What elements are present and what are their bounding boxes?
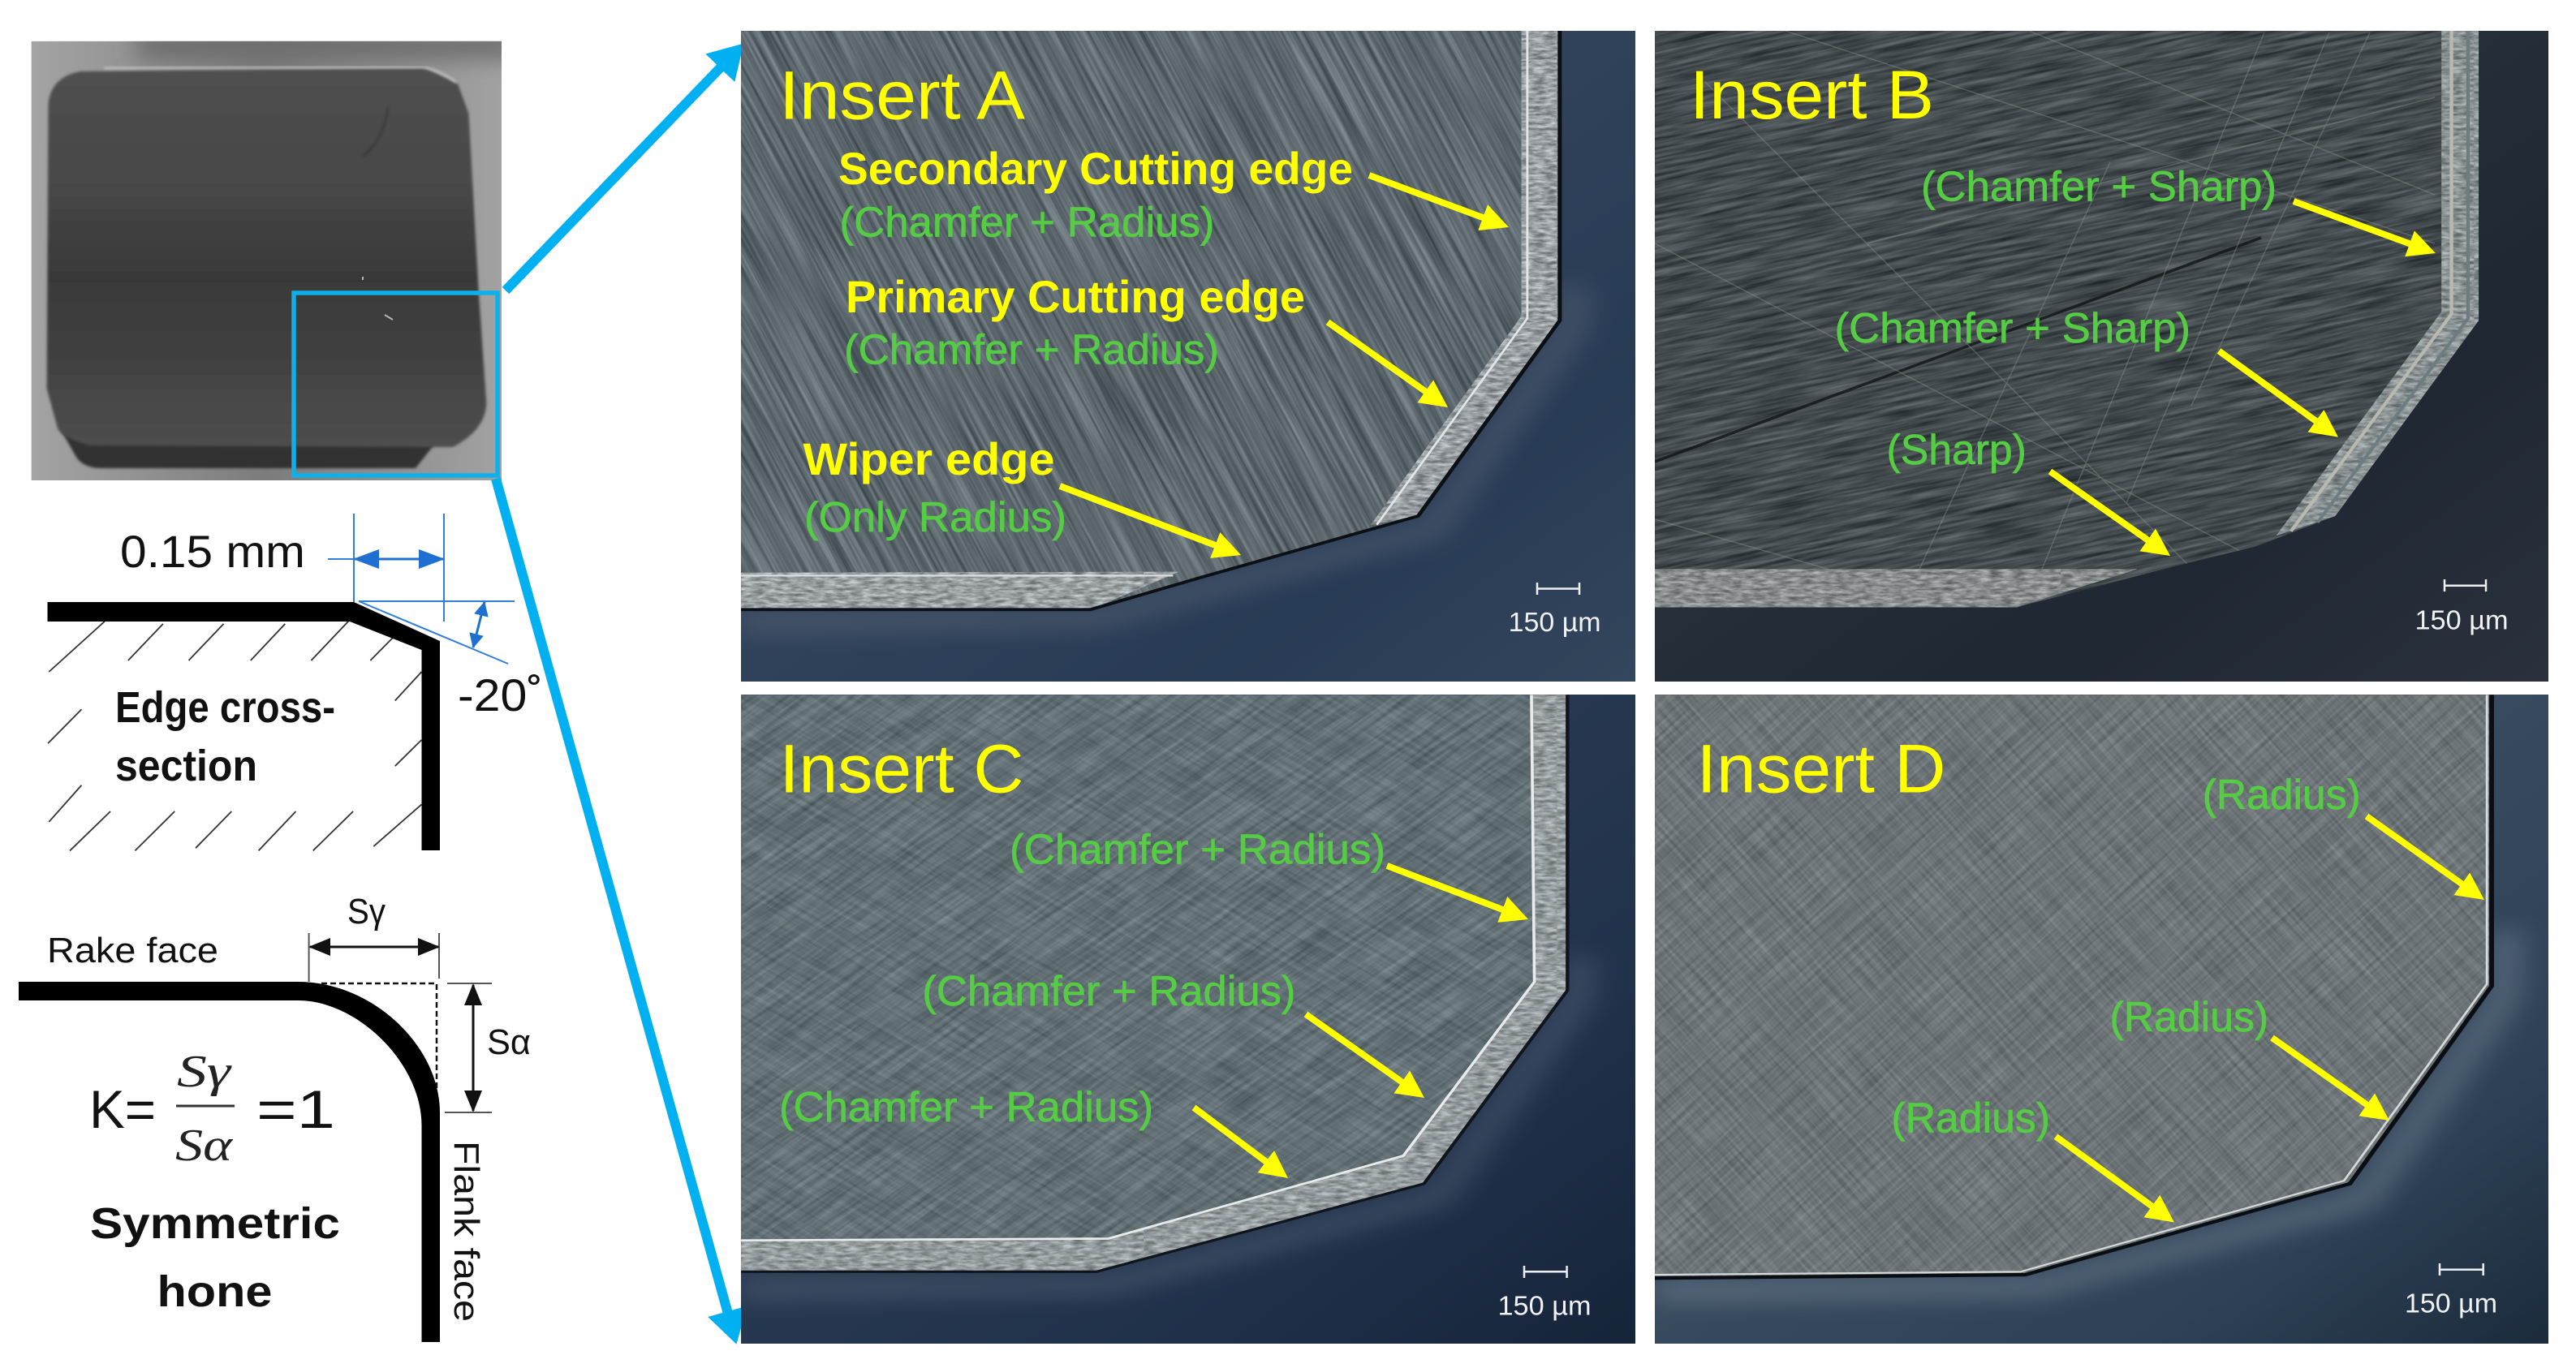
specks [363,277,393,320]
micrograph B [1655,31,2548,682]
zoom box on photograph [294,293,498,475]
label top: (Radius) [2203,772,2361,819]
extension lines [309,933,492,1112]
scale bar [2445,579,2486,592]
label middle: (Chamfer + Sharp) [1834,305,2190,352]
arrow [2056,1137,2159,1211]
metal surface [741,31,1521,604]
formula K: K= [89,1079,156,1139]
dimension arrow 0.15 mm [355,558,443,560]
label S-gamma: Sγ [347,892,386,931]
crack mark [364,107,388,156]
metal surface [1655,31,2548,682]
caption line 2: hone [157,1267,273,1316]
diagram: symmetric hone [19,892,531,1342]
insert side wall [61,430,434,468]
angle arrow [473,602,485,647]
label bottom: (Radius) [1891,1095,2050,1142]
panel: insert D [1655,695,2548,1344]
label middle: (Chamfer + Radius) [922,968,1295,1015]
scale label: 150 µm [2405,1288,2497,1319]
glow around edge [741,286,1574,622]
scale bar [1537,583,1579,595]
metal surface [1655,695,2548,1344]
sublabel: (Chamfer + Radius) [844,327,1219,374]
dimension lines [328,514,515,664]
micrograph A [741,31,1635,682]
label S-alpha: Sα [487,1022,531,1062]
scale label: 150 µm [1498,1290,1591,1320]
arrow [1328,322,1432,396]
label primary cutting edge: Primary Cutting edge [846,271,1305,322]
hatching [48,622,421,850]
dashed construction lines [321,983,437,1091]
sublabel: (Chamfer + Radius) [839,200,1214,247]
cross-hatch layer [1655,695,2548,1344]
scale bar [2440,1263,2483,1276]
label top: (Chamfer + Sharp) [1921,164,2277,211]
label bottom: (Sharp) [1886,427,2027,474]
arrow [1060,486,1223,548]
reflection on insert edge [104,67,457,83]
angle label: -20˚ [458,669,543,721]
label rake face: Rake face [47,931,218,970]
fraction bar [176,1105,235,1107]
S-gamma arrow [310,946,438,948]
upper shadow band [138,32,519,58]
arrow [2294,201,2417,247]
dimension label: 0.15 mm [120,526,305,577]
formula denominator: Sα [175,1121,234,1171]
metal surface [741,695,1635,1344]
panel: insert C [741,695,1635,1344]
arrow: to upper panels [506,63,725,290]
micrograph D [1655,695,2548,1344]
arrow [1369,175,1490,221]
arrow [2219,351,2323,426]
cross-hatch layer [741,695,1635,1344]
arrow [2050,471,2154,544]
arrow [1194,1108,1273,1167]
insert top face [47,67,486,447]
glow around edge [741,956,1580,1289]
label top: (Chamfer + Radius) [1010,826,1385,873]
chamfered edge profile [47,602,440,850]
title: Insert D [1696,731,1946,807]
arrow [2367,816,2468,888]
title: Insert A [779,57,1025,133]
caption: Symmetric [90,1199,340,1248]
edge band A [741,31,1560,609]
micrograph C [741,695,1635,1344]
caption: Edge cross- [115,683,335,732]
formula numerator: Sγ [177,1047,233,1097]
scale label: 150 µm [2415,604,2508,635]
label bottom: (Chamfer + Radius) [779,1084,1153,1131]
edge band B [1655,31,2479,608]
arrow [1387,866,1510,912]
arrow [1306,1014,1408,1086]
label wiper edge: Wiper edge [803,433,1055,484]
title: Insert B [1690,57,1934,133]
diagram: edge cross-section [47,514,543,850]
panel: insert B [1655,31,2548,682]
arrow: to lower panels [496,479,729,1318]
scale bar [1524,1266,1567,1278]
arrow [2272,1038,2373,1109]
title: Insert C [779,731,1024,807]
glow around edge [1655,930,2506,1291]
label secondary cutting edge: Secondary Cutting edge [838,143,1353,194]
panel: insert A [741,31,1635,682]
scratches [1655,31,2435,682]
panel: insert photograph [32,32,519,480]
edge band C [741,695,1567,1271]
label flank face: Flank face [446,1141,486,1322]
S-alpha arrow [472,985,474,1111]
sublabel: (Only Radius) [804,494,1066,541]
caption line 2: section [115,742,257,790]
scale label: 150 µm [1509,607,1601,637]
formula result: =1 [256,1079,335,1139]
label middle: (Radius) [2110,994,2268,1041]
honed edge profile [19,982,440,1342]
edge line D [1655,695,2492,1278]
